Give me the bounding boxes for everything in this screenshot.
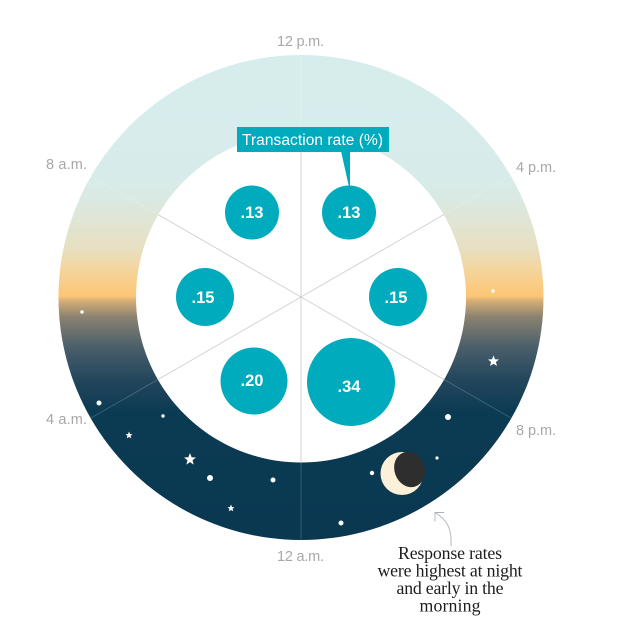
bubble: 12-4 a.m.: [220, 348, 288, 414]
hour labels: 8 p.m.: [516, 423, 556, 439]
bubble: 12-2 p.m.: [322, 186, 376, 240]
callout: transaction rate: Transaction rate (%): [242, 132, 383, 149]
bubble: 12-2 p.m.: .13: [338, 204, 360, 222]
annotation: [378, 543, 523, 616]
bubble: 8 p.m.-12 a.m.: .34: [338, 378, 361, 396]
hour labels: [46, 34, 556, 565]
bubble: 8 p.m.-12 a.m.: [307, 338, 395, 426]
bubble: 4-8 p.m.: .15: [385, 289, 407, 307]
icon: crescent moon: [380, 452, 425, 495]
bubble: 10 a.m.-12 p.m.: .13: [241, 204, 263, 222]
hour labels: 4 a.m.: [46, 412, 87, 428]
callout: transaction rate: [237, 127, 389, 187]
hour labels: 4 p.m.: [516, 160, 556, 176]
hour labels: 8 a.m.: [46, 157, 87, 173]
arrow pointing to night segment: [435, 512, 451, 546]
stars and dots in the night sky: [80, 289, 499, 526]
annotation: morning: [420, 596, 481, 616]
bubble: 4-8 a.m.: .15: [192, 289, 214, 307]
bubble: 10 a.m.-12 p.m.: [225, 186, 279, 240]
hour labels: 12 p.m.: [277, 34, 324, 50]
bubble: 4-8 p.m.: [369, 268, 427, 326]
day-night ring: [59, 55, 544, 540]
annotation: and early in the: [396, 578, 504, 598]
hour labels: 12 a.m.: [277, 549, 324, 565]
bubble: 4-8 a.m.: [176, 268, 234, 326]
annotation: Response rates: [398, 543, 502, 563]
bubble: 12-4 a.m.: .20: [241, 372, 263, 390]
annotation: were highest at night: [378, 560, 523, 580]
spokes dividing the clock into six segments: [91, 55, 511, 540]
